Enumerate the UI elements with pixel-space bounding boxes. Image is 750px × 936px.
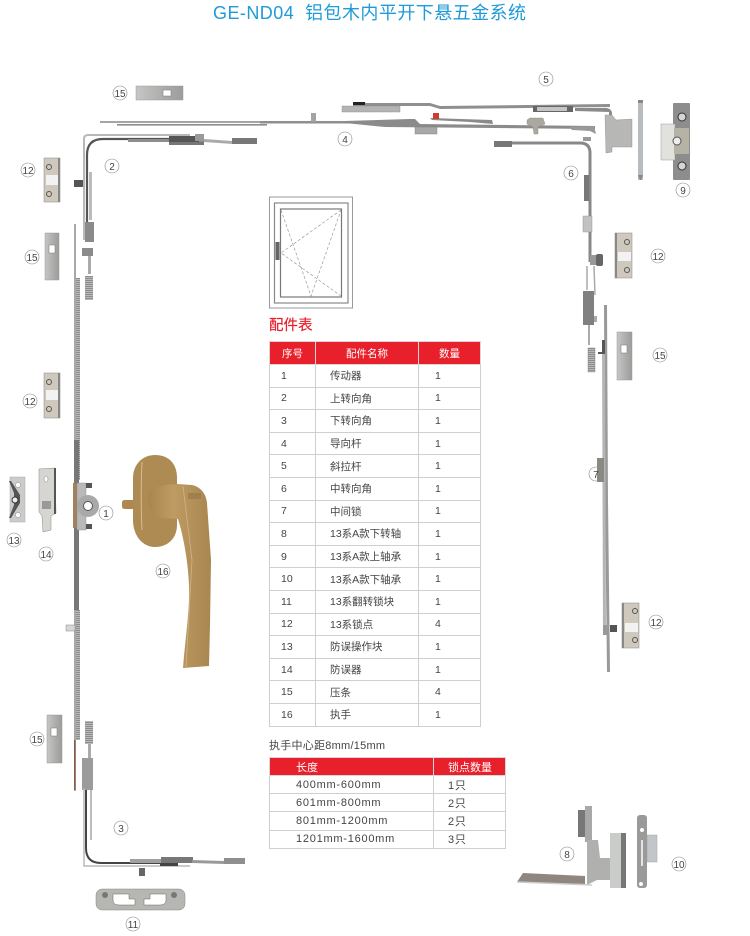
table: parts list: 1 bbox=[435, 370, 441, 382]
number markers: 5 bbox=[543, 75, 549, 86]
table: parts list: 13系A款上轴承 bbox=[330, 551, 401, 563]
table: parts list: 15 bbox=[281, 686, 293, 698]
left vertical rack rod bbox=[66, 224, 80, 791]
number markers: 1 bbox=[103, 509, 109, 520]
table: parts list: 6 bbox=[281, 483, 287, 495]
table: parts list: 4 bbox=[435, 618, 441, 630]
part 8 pin bbox=[638, 100, 643, 180]
number markers: 10 bbox=[673, 860, 685, 871]
number markers: 4 bbox=[342, 135, 348, 146]
table: parts list: 1 bbox=[435, 415, 441, 427]
part 12: left middle lock plate bbox=[44, 373, 60, 418]
table: parts list: 10 bbox=[281, 573, 293, 585]
part 15: left lower strike plate bbox=[47, 715, 62, 763]
part 15: left upper strike plate bbox=[45, 233, 59, 280]
table: parts list: 上转向角 bbox=[330, 393, 372, 405]
part 12: right lower lock plate bbox=[622, 603, 639, 648]
table: parts list: 配件名称 bbox=[346, 348, 388, 360]
table: parts list: 16 bbox=[281, 709, 293, 721]
window diagram bbox=[270, 197, 352, 308]
table: parts list: 13系A款下轴承 bbox=[330, 574, 401, 586]
table: lock points by length: 1201mm-1600mm bbox=[296, 833, 395, 845]
table: parts list: 斜拉杆 bbox=[330, 461, 362, 473]
table: parts list: 13系锁点 bbox=[330, 619, 373, 631]
table: parts list: 防误操作块 bbox=[330, 641, 382, 653]
table: parts list: 2 bbox=[281, 392, 287, 404]
part 11: tilt lock block bbox=[96, 889, 185, 910]
number markers: 12 bbox=[652, 252, 664, 263]
table: parts list: 1 bbox=[435, 664, 441, 676]
number markers: 12 bbox=[22, 166, 34, 177]
table: parts list: 导向杆 bbox=[330, 438, 362, 450]
table: lock points by length: 801mm-1200mm bbox=[296, 815, 388, 827]
part 12: left upper lock plate bbox=[44, 158, 60, 202]
table: parts list: 1 bbox=[281, 370, 287, 382]
table: parts list: 1 bbox=[435, 641, 441, 653]
table: parts list: 1 bbox=[435, 438, 441, 450]
table: parts list: 1 bbox=[435, 392, 441, 404]
table: parts list: 1 bbox=[435, 460, 441, 472]
number markers: 12 bbox=[24, 397, 36, 408]
table: parts list: 5 bbox=[281, 460, 287, 472]
number markers: 13 bbox=[8, 536, 20, 547]
table: lock points by length: 3只 bbox=[448, 834, 467, 846]
number markers: 8 bbox=[564, 850, 570, 861]
table: parts list: 1 bbox=[435, 528, 441, 540]
table: parts list: 3 bbox=[281, 415, 287, 427]
table: parts list: 数量 bbox=[439, 348, 460, 360]
table: parts list: 12 bbox=[281, 618, 293, 630]
table: parts list: 序号 bbox=[282, 348, 303, 360]
part 9: top bearing bbox=[661, 103, 690, 180]
number markers: 3 bbox=[118, 824, 124, 835]
part 4: top guide rod bbox=[100, 113, 596, 134]
table: parts list: 7 bbox=[281, 505, 287, 517]
table: parts list: 1 bbox=[435, 573, 441, 585]
table: parts list: 1 bbox=[435, 505, 441, 517]
table: lock points by length: 2只 bbox=[448, 816, 467, 828]
table: parts list: 14 bbox=[281, 664, 293, 676]
part 10: bottom bearing bbox=[637, 815, 657, 888]
number markers: 6 bbox=[568, 169, 574, 180]
number markers: 15 bbox=[26, 253, 38, 264]
table: lock points by length: 长度 bbox=[296, 762, 318, 774]
table: parts list: 4 bbox=[435, 686, 441, 698]
table: parts list: 8 bbox=[281, 528, 287, 540]
table: parts list: 传动器 bbox=[330, 370, 362, 382]
number markers: 14 bbox=[40, 550, 52, 561]
table: parts list: 13系A款下转轴 bbox=[330, 528, 401, 540]
part 14: anti-misoperation device bbox=[39, 468, 56, 532]
number markers: 12 bbox=[650, 618, 662, 629]
table: parts list: 下转向角 bbox=[330, 415, 372, 427]
part 1: gearbox bbox=[73, 483, 99, 530]
number markers: 9 bbox=[680, 186, 686, 197]
table: parts list: 防误器 bbox=[330, 664, 362, 676]
table: lock points by length: 1只 bbox=[448, 780, 467, 792]
part 6: right corner drive bbox=[494, 137, 603, 372]
part 15: right strike plate bbox=[617, 332, 632, 380]
number markers: 15 bbox=[31, 735, 43, 746]
part 15: top strike plate bbox=[136, 86, 183, 100]
table: parts list: 13系翻转锁块 bbox=[330, 596, 394, 608]
number markers: 2 bbox=[109, 162, 115, 173]
table: lock points by length: 锁点数量 bbox=[448, 762, 492, 774]
table: parts list: 1 bbox=[435, 551, 441, 563]
number markers: 7 bbox=[593, 470, 599, 481]
table: lock points by length: 400mm-600mm bbox=[296, 779, 381, 791]
table: parts list: 执手 bbox=[330, 709, 351, 721]
title: GE-ND04 铝包木内平开下悬五金系统 bbox=[213, 3, 526, 23]
table: parts list bbox=[269, 341, 481, 727]
number markers: 11 bbox=[128, 920, 139, 931]
table: parts list: 1 bbox=[435, 709, 441, 721]
table: parts list: 4 bbox=[281, 438, 287, 450]
table: parts list: 中间锁 bbox=[330, 506, 362, 518]
number markers: 16 bbox=[157, 567, 169, 578]
part 2: top-left corner drive bbox=[74, 134, 257, 300]
table: parts list: 1 bbox=[435, 483, 441, 495]
table: lock points by length: 2只 bbox=[448, 798, 467, 810]
part 16: gold handle bbox=[122, 455, 211, 668]
part 12: right upper lock plate bbox=[615, 233, 632, 278]
number markers: 15 bbox=[114, 89, 126, 100]
part 3: bottom-left corner drive bbox=[82, 721, 245, 876]
table: parts list: 13 bbox=[281, 641, 293, 653]
table: lock points by length: 601mm-800mm bbox=[296, 797, 381, 809]
table: parts list: 11 bbox=[281, 596, 292, 608]
table: parts list: 压条 bbox=[330, 687, 351, 699]
part 5: stay arm bbox=[342, 102, 632, 153]
heading: parts list: 配件表 bbox=[269, 318, 312, 334]
part 13: anti-misoperation block bbox=[9, 477, 25, 522]
part 8: bottom pivot bbox=[517, 806, 626, 888]
table: parts list: 中转向角 bbox=[330, 483, 372, 495]
table: parts list: 1 bbox=[435, 596, 441, 608]
table: parts list: 9 bbox=[281, 551, 287, 563]
text: handle centre distance: 执手中心距8mm/15mm bbox=[269, 740, 385, 752]
part 7: middle lock with long bar bbox=[597, 305, 617, 672]
number markers: 15 bbox=[654, 351, 666, 362]
table: lock points by length bbox=[269, 757, 506, 849]
